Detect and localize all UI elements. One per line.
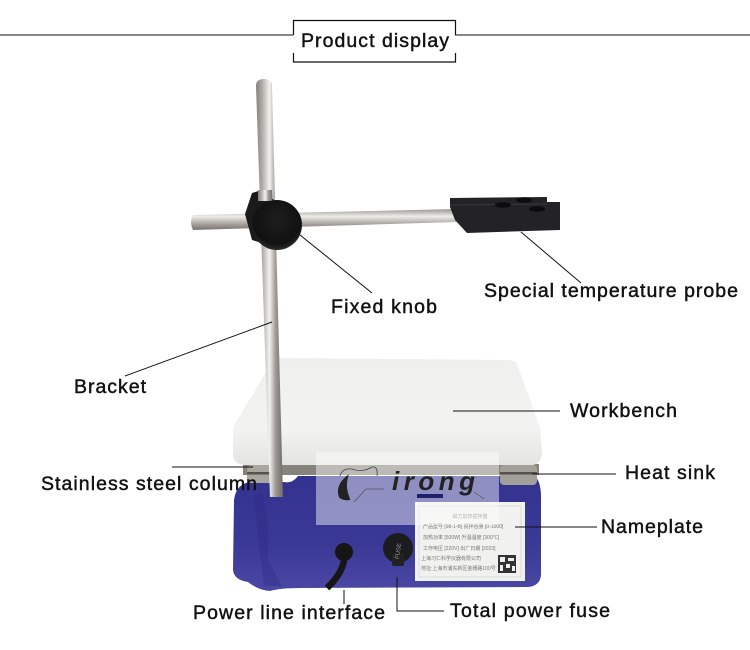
label: Total power fuse [397, 577, 610, 622]
nameplate label: 工作电压 [220V] 出厂日期 [2023] [423, 545, 496, 552]
label: Total power fuse: Total power fuse [450, 600, 610, 622]
label: Workbench: Workbench [570, 400, 677, 422]
probe holder block [450, 197, 560, 233]
fixed knob [245, 190, 302, 250]
blue base body [233, 476, 541, 591]
label: Special temperature probe: Special temperature probe [484, 280, 738, 302]
label: Heat sink: Heat sink [625, 462, 715, 484]
horizontal rod [191, 209, 457, 230]
nameplate label: 地址:上海市浦东新区金穗路100号 [421, 565, 496, 572]
nameplate label: 加热功率 [500W] 升温温度 [300℃] [423, 534, 500, 541]
label: Bracket: Bracket [74, 376, 147, 398]
heading: Product display: Product display [301, 30, 449, 52]
white workbench plate [233, 358, 542, 465]
nameplate label: 磁力加热搅拌器 [452, 513, 488, 520]
label: Fixed knob: Fixed knob [331, 296, 437, 318]
heat sink spacers [243, 464, 539, 485]
fuse holder: FUSE [395, 543, 403, 560]
label: Special temperature probe [484, 232, 738, 302]
watermark: Qirong: irong [392, 466, 475, 496]
power cord [327, 560, 344, 588]
stand: vertical rod [256, 79, 283, 497]
label: Bracket [74, 322, 272, 398]
watermark: Qirong [316, 452, 499, 525]
product photo: magnetic stirrer hot plate with stand [191, 79, 560, 591]
fuse holder [383, 533, 413, 566]
label: Fixed knob [300, 235, 437, 318]
nameplate label [415, 502, 525, 581]
label: Stainless steel column: Stainless steel column [41, 473, 257, 495]
label: Power line interface: Power line interface [193, 602, 385, 624]
label: Nameplate: Nameplate [601, 516, 703, 538]
nameplate label: 产品型号 [98-1-B] 搅拌容量 [0-1000] [423, 523, 504, 530]
nameplate label: 上海习仁科学仪器有限公司 [421, 555, 481, 562]
heading: Product display [0, 20, 750, 62]
